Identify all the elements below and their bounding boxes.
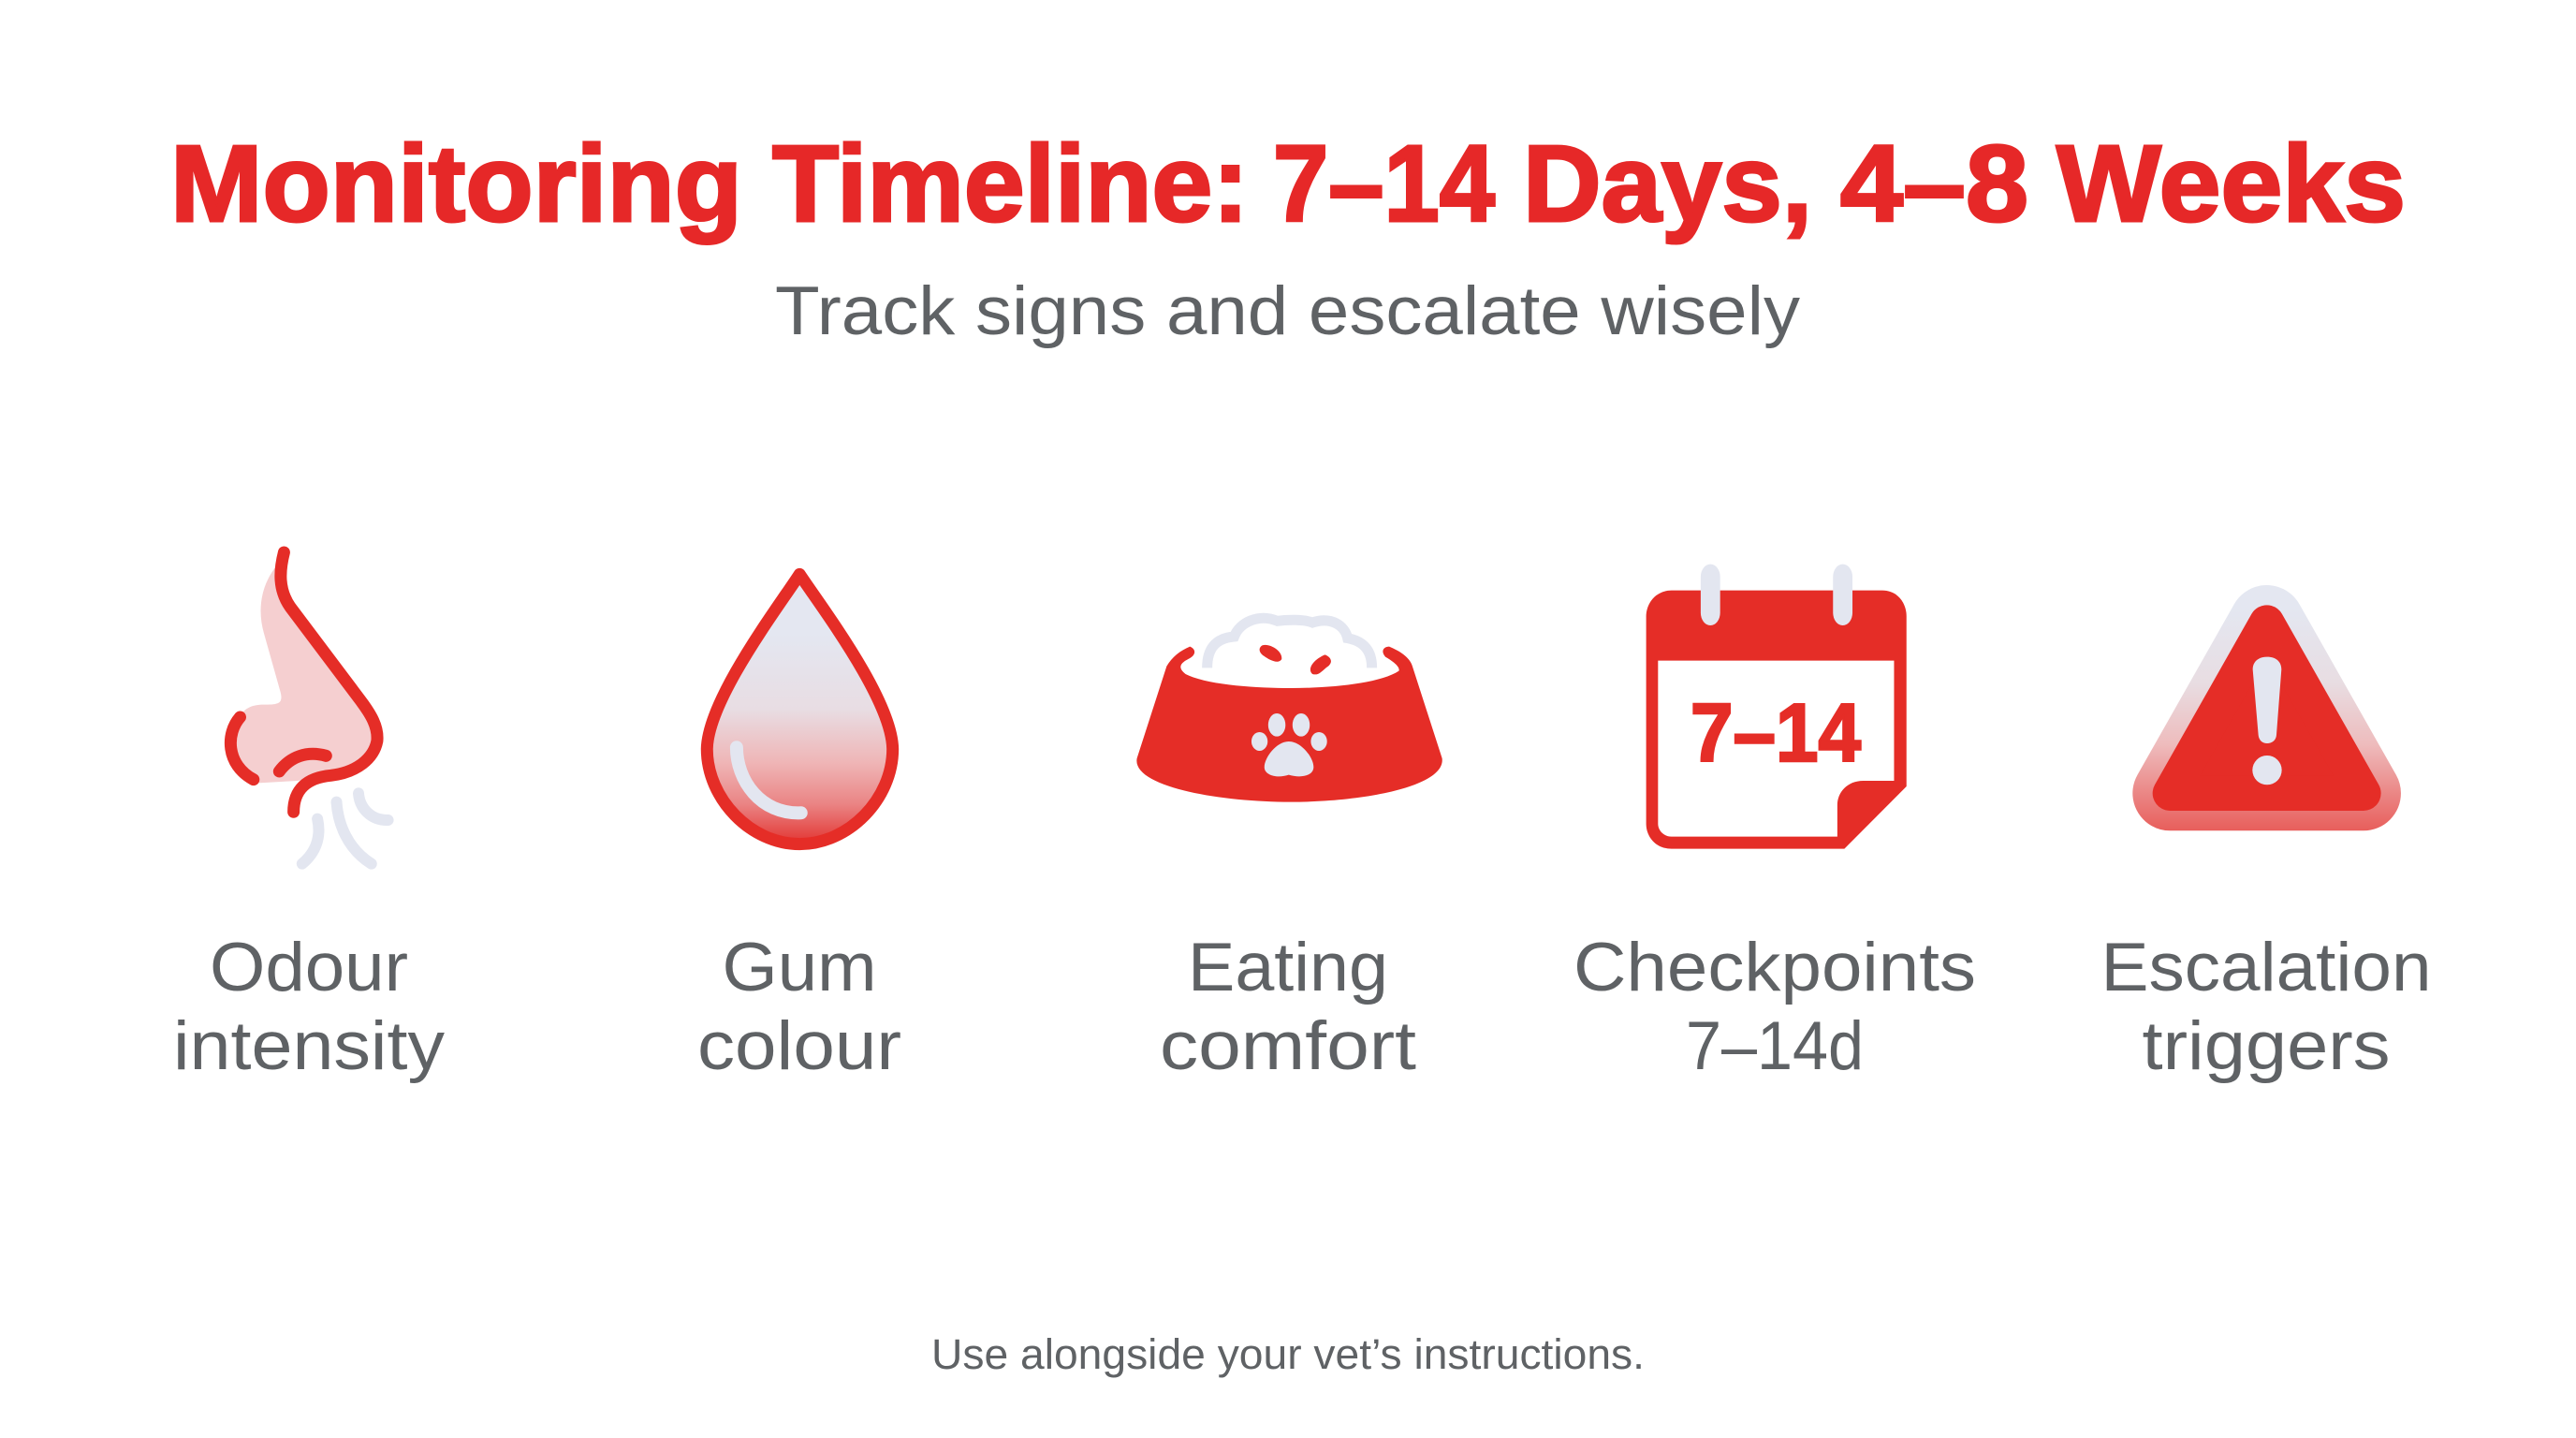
title: Days,: [1523, 123, 1812, 244]
label: eating comfort: Eating: [1188, 930, 1388, 1005]
icon: warning triangle: [2170, 623, 2364, 793]
title: [170, 123, 2406, 244]
title: 4–8: [1840, 123, 2028, 244]
label: odour intensity: [173, 930, 446, 1084]
label: escalation triggers: Escalation: [2100, 930, 2432, 1005]
label: gum colour: [697, 930, 901, 1084]
label: escalation triggers: triggers: [2142, 1008, 2391, 1084]
title: Timeline:: [772, 123, 1249, 244]
footer note: Use alongside your vet’s instructions.: [931, 1330, 1645, 1378]
icon: gum colour drop: [707, 574, 893, 844]
label: odour intensity: intensity: [173, 1008, 446, 1084]
label: checkpoints 7-14d: Checkpoints: [1573, 930, 1976, 1005]
subtitle: Track signs and escalate wisely: [775, 273, 1801, 349]
label: eating comfort: comfort: [1160, 1008, 1416, 1084]
icon: calendar 7-14: [1647, 565, 1907, 849]
title: Weeks: [2056, 123, 2406, 244]
label: checkpoints 7-14d: [1573, 930, 1976, 1084]
icon: calendar 7-14: 7–14: [1690, 686, 1861, 779]
label: gum colour: colour: [697, 1008, 901, 1084]
label: eating comfort: [1160, 930, 1416, 1084]
title: Monitoring: [170, 123, 742, 244]
icon: nose: [230, 552, 388, 864]
icon: food bowl: [1136, 618, 1442, 802]
title: 7–14: [1273, 123, 1495, 244]
label: checkpoints 7-14d: 7–14d: [1686, 1008, 1864, 1084]
label: gum colour: Gum: [723, 930, 876, 1005]
label: odour intensity: Odour: [210, 930, 408, 1005]
label: escalation triggers: [2100, 930, 2432, 1084]
